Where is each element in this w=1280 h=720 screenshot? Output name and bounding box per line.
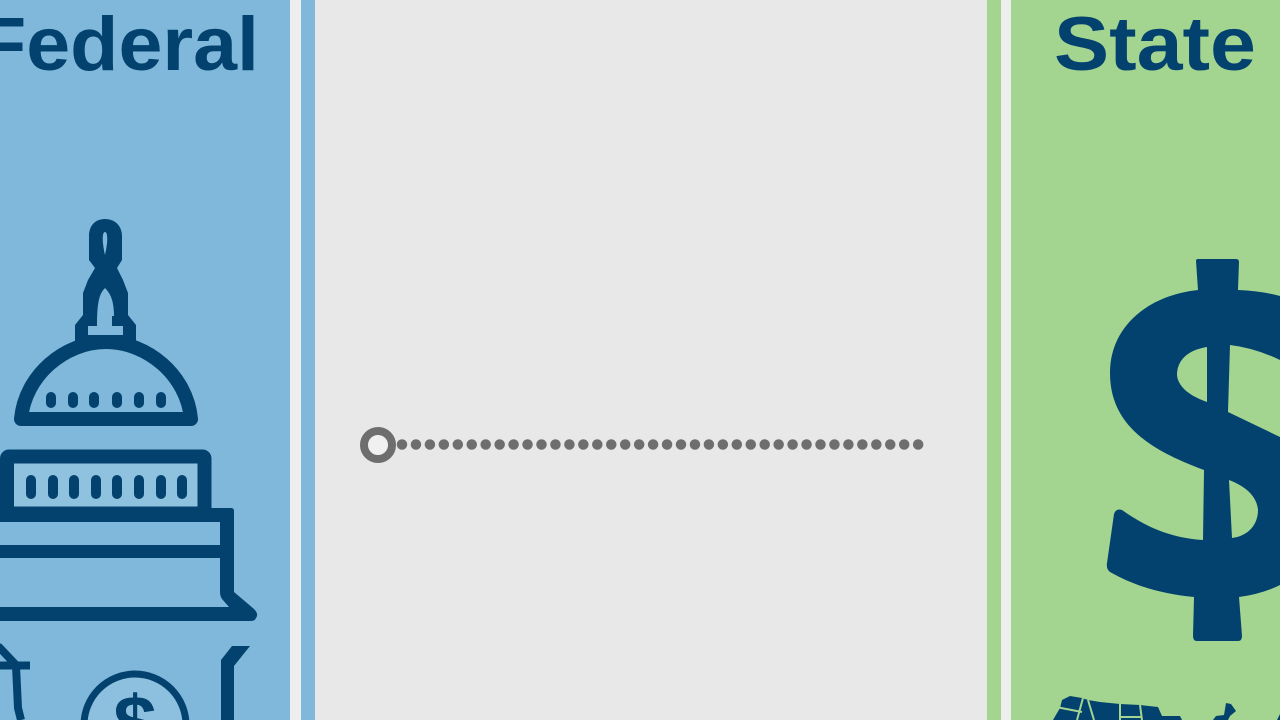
dotted line [402, 439, 920, 450]
small column with roof [0, 646, 30, 720]
icon: dollar symbol [1107, 259, 1280, 641]
coin with dollar sign [84, 674, 186, 720]
right bracket column [221, 646, 250, 720]
panel: state [987, 0, 1280, 720]
capitol lantern [75, 219, 136, 345]
ring start node [364, 431, 392, 459]
centre panel [315, 0, 987, 720]
capitol base [0, 508, 257, 621]
heading: State: State [1054, 2, 1256, 87]
capitol drum [7, 456, 204, 514]
icon: map of the United States [1053, 696, 1280, 720]
capitol dome [21, 342, 191, 419]
timeline marker [364, 431, 920, 459]
panel: federal [0, 0, 315, 720]
icon: capitol building [0, 219, 257, 720]
dome windows [46, 392, 166, 408]
